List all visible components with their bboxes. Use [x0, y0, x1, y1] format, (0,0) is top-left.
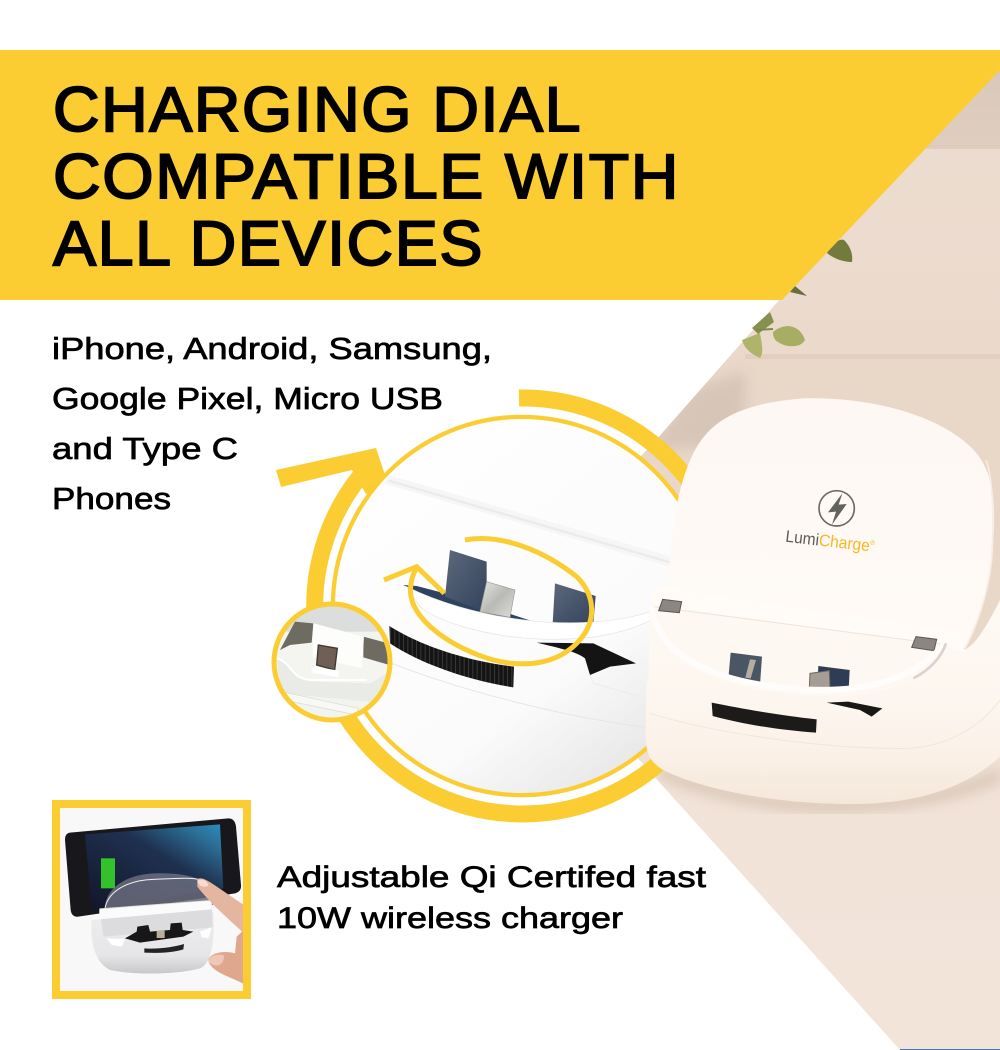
compatible devices text: iPhone, Android, Samsung, — [52, 331, 492, 366]
lower body seam — [392, 663, 623, 724]
top edge of housing — [388, 475, 389, 476]
big circular arrow — [276, 398, 731, 814]
thumbnail: phone on wireless charger — [56, 804, 247, 995]
small micro USB detail circle — [270, 600, 395, 720]
yellow title banner — [0, 50, 1000, 300]
plant leaves — [742, 240, 852, 358]
battery — [101, 858, 115, 888]
clear plastic band — [407, 587, 650, 639]
charger base — [91, 912, 214, 974]
charging lid — [667, 398, 994, 648]
black dial fin — [827, 702, 882, 717]
charger slots — [125, 923, 193, 943]
compatible devices text: Phones — [52, 481, 171, 516]
black dial wheel — [389, 626, 514, 687]
wireless charger text: 10W wireless charger — [277, 902, 623, 935]
charger dial — [144, 944, 184, 953]
photo background: wall and table — [638, 70, 1000, 1050]
wireless charger text — [277, 861, 707, 935]
black dial fin — [537, 643, 636, 675]
compatible devices text: and Type C — [52, 431, 238, 466]
title: CHARGING DIAL — [53, 75, 582, 145]
black dial wheel — [712, 703, 817, 733]
compatible devices text: Google Pixel, Micro USB — [52, 381, 443, 416]
LumiCharge logo: LumiCharge — [785, 527, 874, 556]
phone — [65, 818, 241, 917]
title: COMPATIBLE WITH — [53, 142, 680, 212]
title — [53, 75, 680, 279]
USB-C connector — [480, 582, 515, 617]
connector slots — [403, 550, 596, 623]
zoomed dial detail circle — [330, 414, 679, 798]
wireless charger text: Adjustable Qi Certifed fast — [277, 861, 707, 894]
base front panel — [646, 667, 1000, 804]
clear plastic band — [652, 607, 945, 690]
LumiCharge device photo — [646, 398, 1000, 804]
LumiCharge logo: ® — [870, 539, 875, 547]
device base — [646, 587, 1000, 804]
title: ALL DEVICES — [53, 209, 484, 279]
LumiCharge logo — [785, 491, 876, 556]
inner rotation arrow — [384, 539, 592, 664]
hinges — [659, 599, 937, 651]
phone cradle pocket — [652, 607, 947, 697]
device connector slots — [728, 653, 850, 690]
finger — [197, 878, 244, 933]
compatible devices text — [52, 331, 492, 516]
